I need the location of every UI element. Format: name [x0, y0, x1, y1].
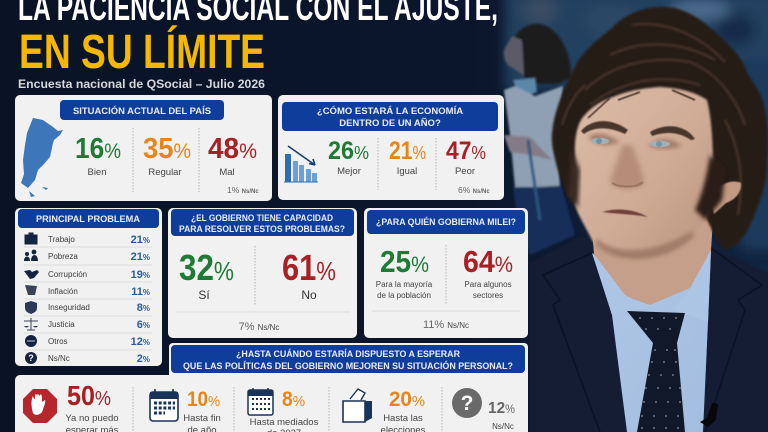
stat: no: 61% [282, 247, 336, 288]
ns/nc note: 7% Ns/Nc [239, 321, 279, 333]
stat: igual: Igual [397, 166, 417, 177]
row: corrupción: Corrupción [48, 270, 87, 279]
stat: mayoría: 25% [380, 244, 429, 279]
row: trabajo [25, 233, 150, 246]
icon: map of Argentina [21, 118, 63, 197]
row: ns/nc [25, 352, 150, 365]
stat: sí: Sí [198, 288, 210, 302]
heading [171, 345, 525, 373]
eyes [591, 138, 609, 144]
stat: peor: 47% [446, 137, 486, 165]
row: trabajo: 21% [131, 234, 150, 246]
shirt [592, 250, 711, 432]
stat: regular: Regular [148, 167, 182, 178]
row: corrupción: 19% [131, 269, 150, 281]
panel: para quién gobierna [364, 208, 528, 338]
stat: sí: 32% [179, 247, 234, 288]
icon: calendar [150, 389, 178, 421]
nose [610, 145, 645, 189]
jaw shadow [596, 232, 695, 259]
stat: algunos sectores: 64% [463, 244, 513, 279]
stat: 12% [452, 388, 515, 431]
ns/nc note: 11% Ns/Nc [423, 319, 469, 331]
eyebrows [581, 121, 628, 134]
panel: capacidad del gobierno [168, 208, 357, 338]
ns/nc note: 1% Ns/Nc [227, 185, 259, 195]
mouth [602, 209, 648, 217]
heading: ¿CÓMO ESTARÁ LA ECONOMÍA [317, 105, 463, 117]
row: ns/nc: ? [28, 353, 34, 363]
row: inflación: Inflación [48, 287, 78, 296]
panel: situación actual del país [15, 95, 272, 201]
stat: mejor [328, 137, 369, 177]
face [575, 87, 713, 261]
heading: QUE LAS POLÍTICAS DEL GOBIERNO MEJOREN SU SITUACIÓN PERSONAL? [183, 360, 513, 372]
row: corrupción [24, 269, 150, 281]
heading [367, 210, 525, 234]
stat: 12%: 12% [488, 400, 515, 417]
heading [282, 102, 498, 131]
stat: mal: 48% [208, 133, 257, 165]
sideburn left [568, 150, 580, 208]
stat: 8%: Hasta mediados [250, 417, 319, 428]
portrait [530, 7, 768, 432]
stat: 20% [343, 388, 426, 432]
row: justicia: 6% [137, 319, 150, 331]
panel: principal problema [15, 208, 162, 366]
stat: igual [389, 137, 426, 177]
row: otros: Otros [48, 337, 68, 346]
heading [60, 100, 224, 120]
row: otros [25, 335, 150, 348]
stat: algunos sectores [463, 244, 513, 300]
jacket [530, 237, 768, 432]
stat: 10%: 10% [187, 388, 220, 411]
heading: ¿EL GOBIERNO TIENE CAPACIDAD [191, 213, 333, 224]
stat: mal: Mal [219, 167, 235, 178]
stat: 20%: 20% [389, 388, 425, 411]
row: ns/nc: Ns/Nc [48, 354, 70, 363]
forehead strands [588, 90, 695, 118]
lapel edges [543, 248, 762, 432]
stat: 50% [23, 380, 119, 432]
icon: stop hand [23, 389, 57, 423]
tie [627, 311, 685, 432]
stat: 10% [150, 388, 221, 432]
stat: 10%: Hasta fin [183, 413, 221, 424]
stat: peor: Peor [455, 166, 475, 177]
stat: no: No [301, 288, 317, 302]
ns/nc note: 6% Ns/Nc [458, 185, 490, 195]
icon: question mark: ? [461, 392, 473, 415]
stat: 8%: 8% [282, 388, 305, 411]
icon: calendar [248, 388, 273, 415]
row: inseguridad [25, 301, 150, 314]
heading: PARA RESOLVER ESTOS PROBLEMAS? [179, 224, 345, 235]
title line 2: EN SU LÍMITE [19, 25, 265, 79]
stat: algunos sectores: Para algunos [464, 280, 512, 289]
heading: SITUACIÓN ACTUAL DEL PAÍS [73, 105, 211, 117]
row: inseguridad: 8% [137, 302, 150, 314]
stat: 50%: 50% [67, 380, 111, 411]
heading [171, 209, 354, 236]
row: inflación [25, 285, 150, 298]
stat: 12%: Ns/Nc [492, 422, 514, 431]
stat: 20%: Hasta las [383, 413, 423, 424]
stat: 8% [248, 388, 319, 432]
heading: PRINCIPAL PROBLEMA [36, 214, 140, 225]
stat: mayoría: Para la mayoría [376, 280, 433, 289]
stat: mayoría: de la población [377, 291, 431, 300]
panel: hasta cuándo esperaría [15, 343, 528, 432]
stat: igual: 21% [389, 137, 426, 165]
subtitle: Encuesta nacional de QSocial – Julio 2026 [18, 77, 265, 91]
row: otros: 12% [131, 336, 150, 348]
ear [709, 182, 741, 214]
row: justicia [24, 318, 150, 331]
stat: bien [75, 133, 121, 178]
title [18, 0, 498, 79]
stat: mejor: 26% [328, 137, 369, 165]
stat: regular: 35% [143, 133, 191, 165]
microphone [700, 403, 718, 427]
crowd woman [504, 24, 575, 255]
stat: bien: Bien [87, 167, 107, 178]
heading: DENTRO DE UN AÑO? [339, 118, 441, 129]
row: pobreza: Pobreza [48, 252, 78, 261]
neck [590, 205, 714, 305]
eye shadows [588, 133, 682, 149]
row: pobreza: 21% [131, 251, 150, 263]
row: justicia: Justicia [48, 320, 75, 329]
panel: cómo estará la economía [278, 95, 504, 200]
collar [593, 253, 647, 315]
row: pobreza [24, 250, 150, 263]
row: inseguridad: Inseguridad [48, 303, 90, 312]
heading: ¿PARA QUIÉN GOBIERNA MILEI? [376, 217, 516, 228]
icon: falling bar chart [284, 146, 318, 182]
stat: algunos sectores: sectores [473, 291, 503, 300]
row: inflación: 11% [131, 286, 150, 298]
stat: bien: 16% [75, 133, 121, 165]
sideburn right [695, 155, 726, 220]
background crowd photo [504, 0, 768, 255]
row: ns/nc: 2% [137, 353, 150, 365]
stat: 50%: Ya no puedo [65, 413, 119, 424]
row: trabajo: Trabajo [48, 235, 75, 244]
heading [18, 209, 159, 228]
hair [552, 7, 768, 249]
stat: peor [446, 137, 486, 177]
stat: mejor: Mejor [337, 166, 361, 177]
icon: ballot box [343, 389, 372, 422]
stat: mayoría [376, 244, 433, 300]
heading: ¿HASTA CUÁNDO ESTARÍA DISPUESTO A ESPERAR [236, 349, 460, 360]
